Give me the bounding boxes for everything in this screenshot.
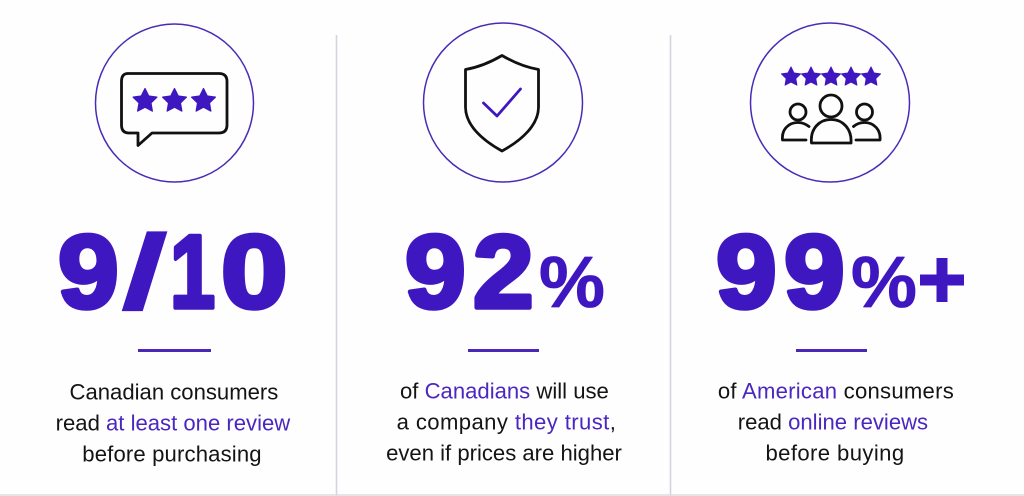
- description text: of Canadians will use: [400, 378, 609, 404]
- statistic: 9/10: /: [120, 212, 169, 332]
- statistic: 92%: 9: [405, 213, 466, 330]
- description text: of American consumers: [718, 378, 954, 404]
- description text: Canadian consumers: [70, 380, 278, 404]
- icon: speech bubble with three stars: [96, 24, 254, 182]
- statistic: 99%+: 9: [716, 213, 777, 330]
- icon: five stars above three people: [750, 23, 910, 182]
- description text: read at least one review: [56, 410, 290, 436]
- statistic: 9/10: 0: [221, 214, 288, 330]
- statistic: 9/10: [58, 212, 288, 332]
- panel: American consumers read reviews: [716, 23, 964, 466]
- accent rule: [138, 349, 211, 352]
- accent rule: [796, 349, 867, 352]
- icon: shield with check mark: [424, 23, 582, 182]
- statistic: 99%+: [716, 213, 964, 330]
- statistic: 92%: [405, 213, 605, 330]
- statistic: 99%+: %: [851, 243, 917, 323]
- statistic: 9/10: 1: [170, 214, 215, 330]
- statistic: 99%+: 9: [784, 213, 845, 330]
- description text: read online reviews: [738, 410, 928, 434]
- description text: before buying: [765, 440, 905, 466]
- panel: Canadian consumers read reviews: [56, 24, 296, 466]
- statistic: 92%: %: [539, 243, 605, 323]
- description text: a company they trust,: [397, 410, 616, 434]
- description text: before purchasing: [82, 442, 262, 466]
- description text: even if prices are higher: [386, 440, 622, 466]
- statistic: 92%: 2: [473, 213, 534, 330]
- accent rule: [468, 349, 539, 352]
- statistic: 9/10: 9: [58, 213, 119, 330]
- panel: Canadians use trusted companies: [386, 23, 622, 466]
